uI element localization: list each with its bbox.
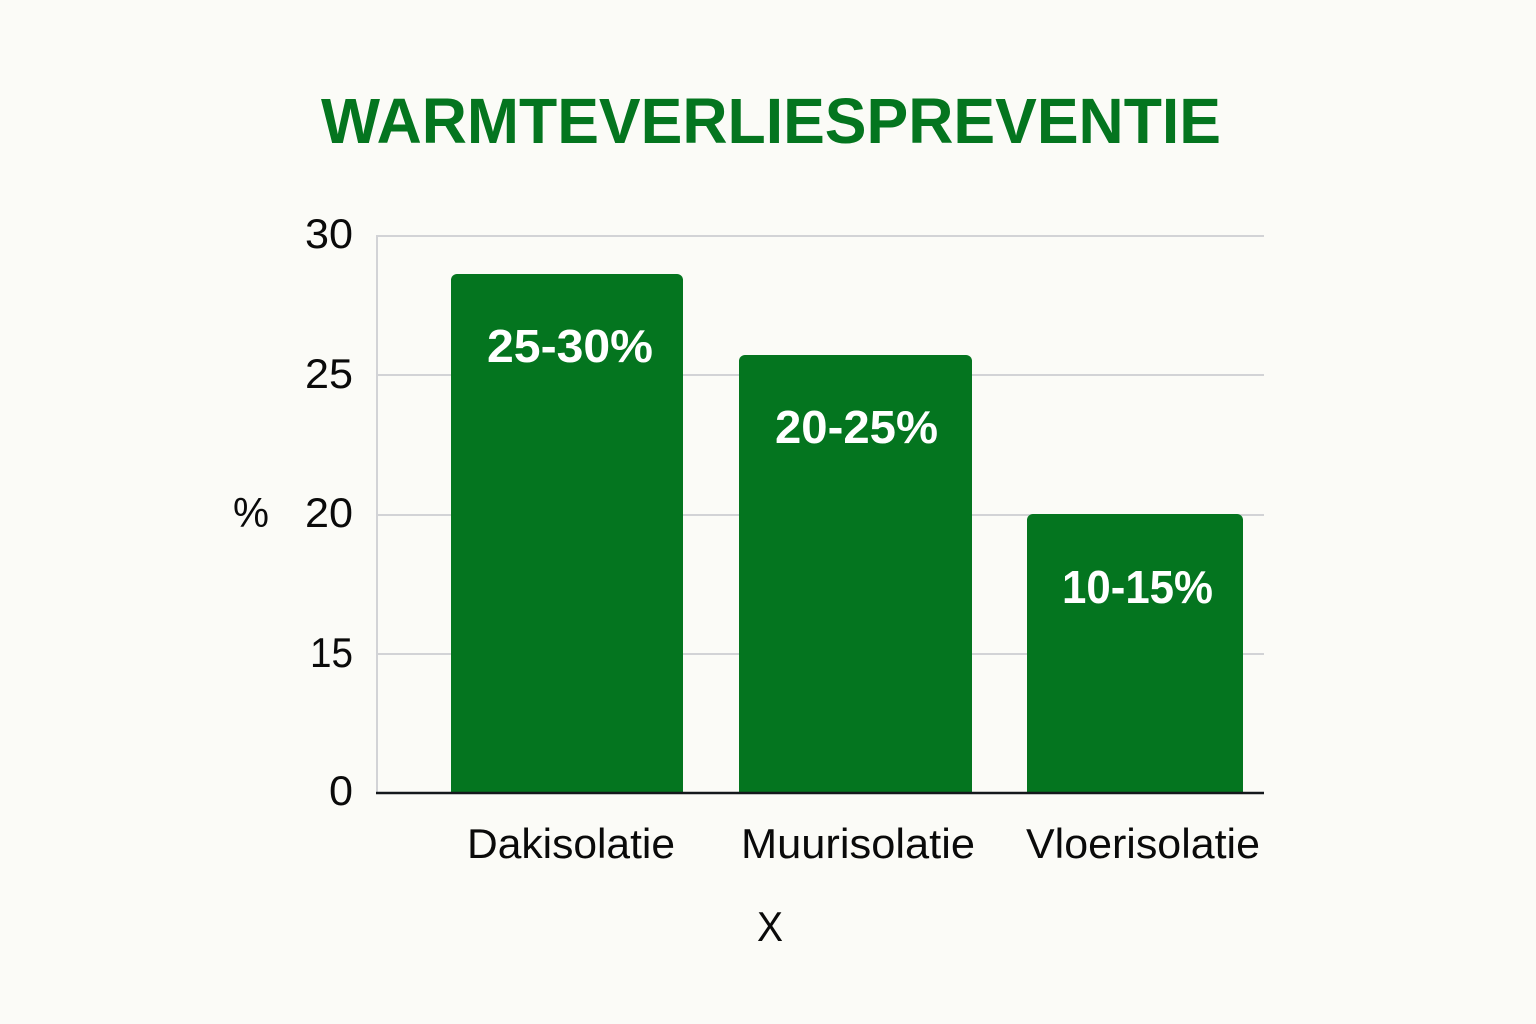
x-axis category labels (467, 820, 1260, 867)
value label: 25-30%: 25-30% (487, 320, 653, 372)
x-axis category labels: Vloerisolatie (1026, 820, 1260, 867)
value label: 20-25%: 20-25% (775, 401, 938, 453)
bar: Vloerisolatie (1027, 514, 1243, 793)
bar: Dakisolatie (451, 274, 683, 793)
x-axis category labels: Dakisolatie (467, 820, 675, 867)
x-axis baseline (376, 792, 1264, 794)
y-axis tick labels: 30 (305, 210, 353, 257)
x-axis title: X (757, 903, 783, 950)
y-axis tick labels (305, 210, 353, 814)
y-axis tick labels: 20 (305, 489, 353, 536)
y-axis tick labels: 0 (329, 767, 353, 814)
x-axis category labels: Muurisolatie (741, 820, 975, 867)
y-axis title: % (233, 489, 269, 536)
value label: 10-15%: 10-15% (1062, 561, 1213, 613)
bar chart (233, 210, 1264, 950)
y-axis tick labels: 25 (305, 350, 353, 397)
bar: Muurisolatie (739, 355, 972, 793)
y-axis tick labels: 15 (310, 629, 353, 676)
title: WARMTEVERLIESPREVENTIE (321, 85, 1221, 157)
